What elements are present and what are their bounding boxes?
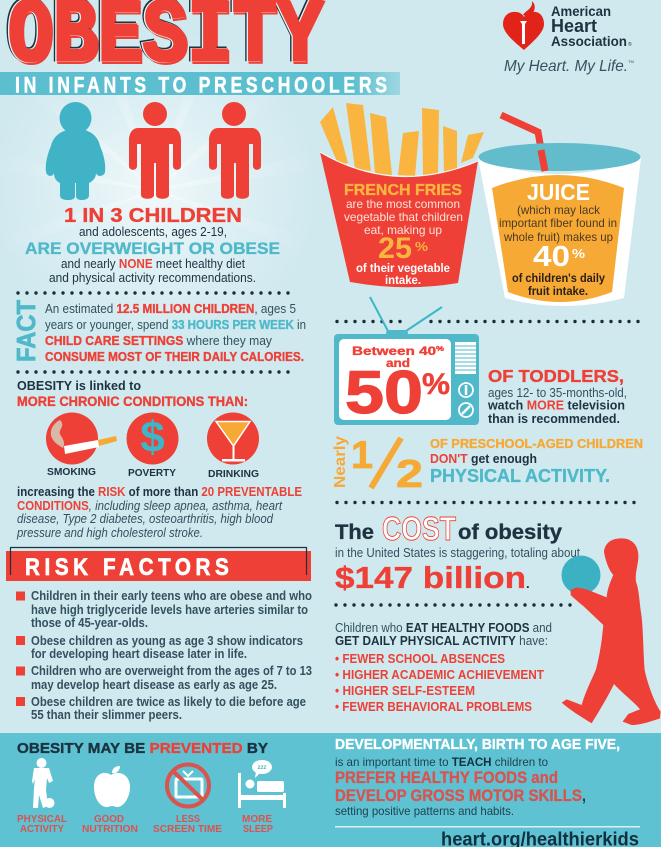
icon: child with ball — [562, 538, 661, 725]
heading: prevented by: OBESITY MAY BE PREVENTED BY — [17, 740, 268, 757]
text block: french fries: % — [415, 239, 428, 254]
text block: toddlers: than is recommended. — [488, 412, 620, 426]
text block: french fries: of their vegetable — [356, 261, 450, 275]
labels: prevention: SCREEN TIME — [153, 824, 222, 835]
risk item 4: Obese children are twice as likely to die before age — [31, 695, 306, 709]
text block: healthy children — [335, 621, 552, 714]
fact block: An estimated 12.5 MILLION CHILDREN, ages 5 — [45, 302, 296, 316]
labels: prevention: GOOD — [94, 814, 124, 825]
statistic: nearly one half: DON'T get enough — [430, 452, 537, 466]
labels: prevention: SLEEP — [243, 824, 273, 835]
icon: drinking — [207, 412, 259, 480]
text block: healthy children: • FEWER SCHOOL ABSENCES — [335, 652, 505, 666]
icon: television: 50 — [345, 359, 423, 426]
icon: red child 2 — [209, 102, 261, 199]
icon: poverty: POVERTY — [128, 467, 176, 479]
risk item 1: those of 45-year-olds. — [31, 616, 148, 630]
logo: American Heart Association: ® — [628, 41, 632, 48]
logo: American Heart Association: American — [551, 3, 611, 19]
icon: physical activity — [32, 758, 54, 808]
subtitle band: IN INFANTS TO PRESCHOOLERS — [15, 74, 387, 98]
text block: increasing the risk: CONDITIONS, including sleep apnea, asthma, heart — [17, 499, 282, 513]
text block: toddlers: ages 12- to 35-months-old, — [488, 386, 627, 400]
logo: American Heart Association: Heart — [551, 16, 597, 36]
text block: juice: of children's daily — [512, 271, 605, 285]
heading: chronic conditions — [17, 378, 248, 409]
list: risk factors — [16, 589, 312, 722]
panel: prevention band — [0, 733, 661, 847]
icon: television: Between 40 — [352, 344, 418, 358]
labels: prevention — [17, 814, 273, 835]
icon: more sleep: zzz — [258, 765, 266, 771]
statistic: nearly one half: OF PRESCHOOL-AGED CHILDREN — [430, 436, 643, 451]
statistic: nearly one half: 1 — [351, 434, 373, 477]
icon: drinking: DRINKING — [208, 468, 259, 480]
text block: 1 in 3 children: and physical activity recommendations. — [49, 271, 256, 285]
risk item 2 — [16, 634, 303, 661]
text block: increasing the risk: pressure and high cholesterol stroke. — [16, 526, 203, 540]
icon: less screen time — [167, 764, 209, 806]
icon: smoking: SMOKING — [47, 466, 96, 478]
fact block: CHILD CARE SETTINGS where they may — [45, 334, 273, 348]
statistic: nearly one half: Nearly — [332, 436, 349, 488]
text block: developmentally: is an important time to TEACH children to — [335, 755, 548, 769]
logo: American Heart Association: My Heart. My Life. — [504, 58, 628, 75]
statistic: nearly one half: PHYSICAL ACTIVITY. — [430, 466, 610, 486]
heading: risk factors — [6, 548, 311, 581]
labels: prevention: PHYSICAL — [17, 814, 67, 825]
risk item 1 — [16, 589, 312, 630]
text block: toddlers: OF TODDLERS, — [488, 366, 624, 386]
risk item 1: Children in their early teens who are obese and who — [31, 589, 312, 603]
cost of obesity: COST — [382, 510, 456, 547]
text block: french fries: 25 — [378, 232, 412, 265]
risk item 2: for developing heart disease later in life. — [31, 647, 247, 661]
text block: increasing the risk: increasing the RISK of more than 20 PREVENTABLE — [17, 485, 302, 499]
fact block — [11, 300, 306, 364]
text block: developmentally: setting positive patterns and habits. — [335, 804, 514, 818]
cost of obesity: of obesity — [458, 521, 562, 544]
heading: chronic conditions: OBESITY is linked to — [17, 378, 141, 393]
text block: juice: fruit intake. — [528, 284, 588, 298]
labels: prevention: MORE — [242, 814, 272, 825]
risk item 4 — [16, 695, 306, 722]
icon: heart and torch — [503, 1, 544, 50]
text block: juice: important fiber found in — [499, 216, 617, 230]
text block: french fries — [344, 182, 463, 287]
icon: television: % — [436, 346, 445, 353]
text block: french fries: eat, making up — [364, 223, 442, 237]
text block: juice — [499, 179, 617, 298]
risk item 3: may develop heart disease as early as age 25. — [31, 678, 277, 692]
icon: poverty — [126, 412, 178, 479]
text block: 1 in 3 children: and adolescents, ages 2-19, — [79, 225, 227, 239]
icon: overweight child — [46, 102, 105, 200]
fact block: years or younger, spend 33 HOURS PER WEEK in — [45, 318, 306, 332]
risk item 4: 55 than their slimmer peers. — [31, 708, 182, 722]
fact block: CONSUME MOST OF THEIR DAILY CALORIES. — [45, 350, 304, 364]
heading: chronic conditions: MORE CHRONIC CONDITIONS THAN: — [17, 394, 248, 409]
cost of obesity: The — [335, 521, 374, 544]
text block: developmentally: DEVELOP GROSS MOTOR SKILLS, — [335, 786, 586, 805]
logo: American Heart Association: Association — [551, 34, 627, 49]
text block: healthy children: • HIGHER SELF-ESTEEM — [335, 684, 475, 698]
text block: healthy children: Children who EAT HEALTHY FOODS and — [335, 621, 552, 635]
text block: french fries: FRENCH FRIES — [344, 182, 462, 199]
text block: french fries: vegetable that children — [344, 210, 463, 224]
text block: french fries: are the most common — [346, 197, 460, 211]
text block: healthy children: GET DAILY PHYSICAL ACTIVITY have: — [335, 634, 548, 648]
text block: juice: (which may lack — [517, 203, 601, 217]
text block: juice: JUICE — [527, 179, 590, 205]
labels: prevention: NUTRITION — [82, 824, 138, 835]
icon: french fries — [320, 103, 484, 287]
risk item 2: Obese children as young as age 3 show indicators — [31, 634, 303, 648]
risk item 1: have high triglyceride levels have arteries similar to — [31, 603, 308, 617]
heading: risk factors: RISK FACTORS — [25, 554, 229, 580]
text block: toddlers — [487, 366, 627, 426]
icon: juice glass — [478, 115, 641, 306]
statistic: nearly one half — [332, 434, 643, 496]
text block: 1 in 3 children: 1 IN 3 CHILDREN — [64, 205, 242, 227]
sunburst behind figures — [0, 25, 320, 355]
fact block: FACT — [11, 300, 41, 362]
cost of obesity — [335, 510, 580, 595]
text block: increasing the risk: disease, Type 2 diabetes, osteoarthritis, high blood — [17, 512, 274, 526]
risk item 3: Children who are overweight from the ages of 7 to 13 — [31, 664, 312, 678]
labels: prevention: ACTIVITY — [20, 824, 64, 835]
text block: developmentally: PREFER HEALTHY FOODS and — [335, 768, 558, 787]
icon: good nutrition — [94, 766, 130, 807]
panel: obesity may be prevented by — [17, 740, 286, 835]
text block: toddlers: watch MORE television — [487, 398, 625, 412]
cost of obesity: in the United States is staggering, totaling about — [335, 546, 580, 560]
text block: juice: 40 — [533, 241, 570, 273]
icon: television — [334, 297, 479, 426]
statistic: nearly one half: 2 — [396, 453, 423, 496]
icon: smoking — [46, 412, 117, 478]
text block: healthy children: • FEWER BEHAVIORAL PROBLEMS — [335, 700, 532, 714]
text block: developmentally — [335, 737, 640, 847]
labels: prevention: LESS — [176, 814, 200, 825]
icon: television: and — [386, 356, 410, 370]
icon: red child 1 — [129, 102, 181, 199]
icon: more sleep — [238, 760, 286, 808]
text block: increasing the risk — [16, 485, 302, 540]
logo: American Heart Association: TM — [628, 59, 634, 64]
logo: American Heart Association — [503, 1, 634, 75]
text block: healthy children: • HIGHER ACADEMIC ACHIEVEMENT — [335, 668, 544, 682]
icon: poverty: $ — [140, 413, 165, 462]
text block: 1 in 3 children — [25, 205, 280, 285]
icon: television: % — [422, 368, 450, 401]
cost of obesity: . — [526, 576, 530, 591]
text block: 1 in 3 children: ARE OVERWEIGHT OR OBESE — [25, 239, 280, 258]
risk item 3 — [16, 664, 312, 692]
text block: juice: whole fruit) makes up — [503, 230, 613, 244]
text block: juice: % — [572, 246, 585, 261]
text block: french fries: intake. — [385, 273, 421, 287]
cost of obesity: $147 billion — [335, 560, 526, 595]
text block: 1 in 3 children: and nearly NONE meet healthy diet — [61, 257, 245, 271]
text block: developmentally: DEVELOPMENTALLY, BIRTH TO AGE FIVE, — [335, 737, 620, 753]
